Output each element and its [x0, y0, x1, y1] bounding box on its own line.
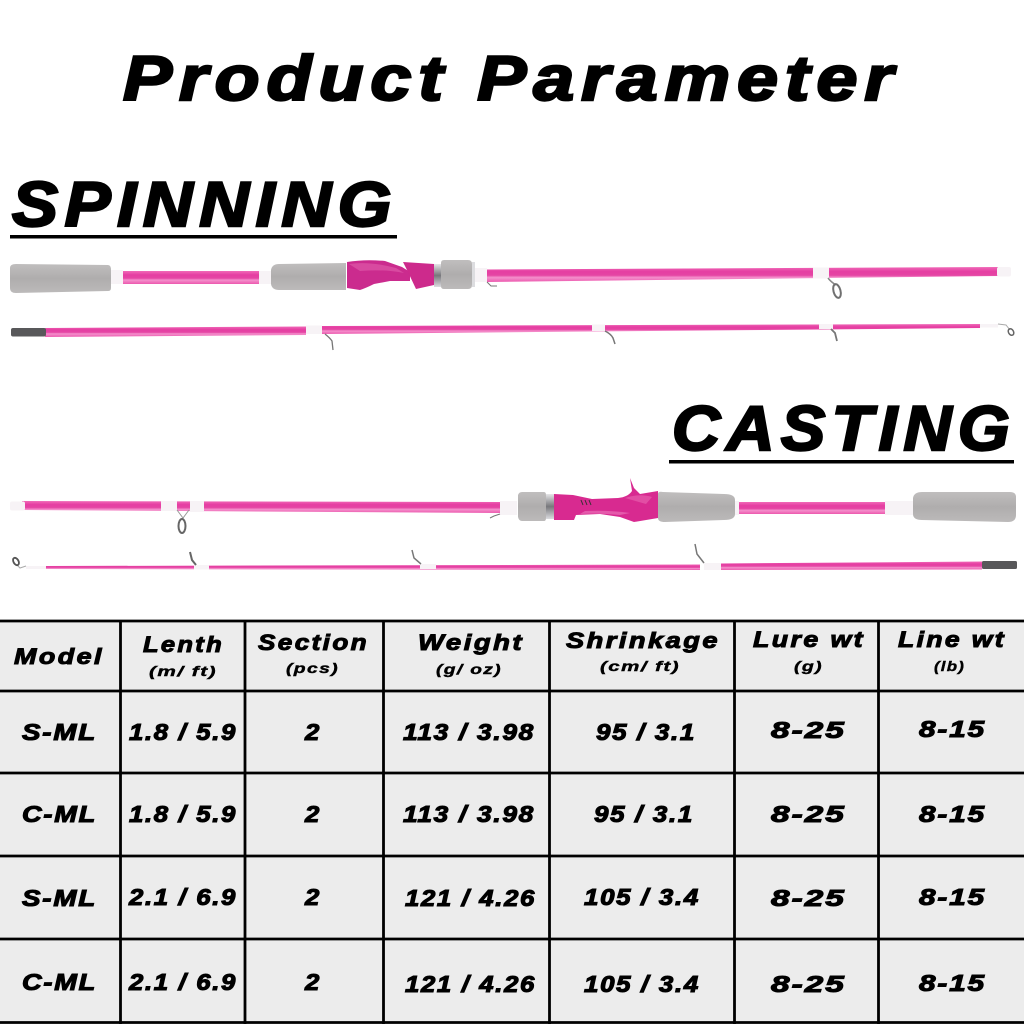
row 4: 8-25: [771, 971, 846, 997]
row 2: C-ML: [22, 801, 97, 827]
header: shrinkage: [566, 628, 720, 674]
row 4: [22, 969, 986, 997]
row 2: 1.8 / 5.9: [129, 801, 237, 827]
parameter table: [0, 620, 1024, 1024]
row 4: 2.1 / 6.9: [128, 969, 237, 995]
spinning rod tip section: [11, 324, 1015, 350]
row 3: 105 / 3.4: [584, 884, 700, 910]
row 3: 8-15: [919, 884, 986, 910]
table background: [0, 620, 1024, 1024]
row 2: 95 / 3.1: [594, 801, 694, 827]
row 4: C-ML: [22, 969, 97, 995]
row 2: 8-25: [771, 801, 846, 827]
row 2: 2: [304, 801, 321, 827]
row 4: 2: [304, 969, 321, 995]
row 2: 113 / 3.98: [403, 801, 535, 827]
casting rod butt section: [10, 478, 1016, 533]
row 1: 95 / 3.1: [596, 719, 696, 745]
header: shrinkage: Shrinkage: [566, 628, 720, 653]
header: lure weight: (g): [794, 658, 823, 674]
header: lure weight: Lure wt: [753, 627, 865, 652]
spinning rod butt section: [10, 260, 1011, 299]
row 4: 121 / 4.26: [405, 971, 536, 997]
row 3: 8-25: [771, 885, 846, 911]
heading: casting: CASTING: [672, 394, 1016, 464]
header: model: Model: [14, 644, 104, 669]
row 3: S-ML: [22, 885, 97, 911]
header: section: [258, 630, 369, 676]
header: line weight: (lb): [934, 658, 965, 674]
header: length: (m/ ft): [149, 663, 217, 679]
header: length: Lenth: [143, 632, 224, 657]
row 4: 8-15: [919, 970, 986, 996]
row 2: 8-15: [919, 801, 986, 827]
header: lure weight: [753, 627, 865, 674]
header: line weight: [898, 627, 1006, 674]
row 1: [22, 716, 986, 745]
row 3: 2.1 / 6.9: [128, 884, 237, 910]
header: weight: [418, 630, 524, 677]
header: section: (pcs): [286, 660, 339, 676]
row 1: 8-15: [919, 716, 986, 742]
row 1: 113 / 3.98: [403, 719, 535, 745]
row 1: 2: [304, 719, 321, 745]
row 1: 8-25: [771, 717, 846, 743]
row 4: 105 / 3.4: [584, 971, 700, 997]
row 2: [22, 801, 986, 827]
row 3: 121 / 4.26: [405, 885, 536, 911]
row 1: S-ML: [22, 719, 97, 745]
title: Product Parameter: [123, 44, 900, 114]
row 3: [22, 884, 986, 911]
header: length: [143, 632, 224, 679]
row 3: 2: [304, 884, 321, 910]
header: section: Section: [258, 630, 369, 655]
table grid: [0, 620, 1024, 1024]
header: shrinkage: (cm/ ft): [600, 658, 680, 674]
heading: spinning: SPINNING: [12, 170, 398, 240]
header: weight: (g/ oz): [436, 661, 502, 677]
row 1: 1.8 / 5.9: [129, 719, 237, 745]
header: line weight: Line wt: [898, 627, 1006, 652]
header: weight: Weight: [418, 630, 524, 655]
casting rod tip section: [12, 544, 1017, 570]
